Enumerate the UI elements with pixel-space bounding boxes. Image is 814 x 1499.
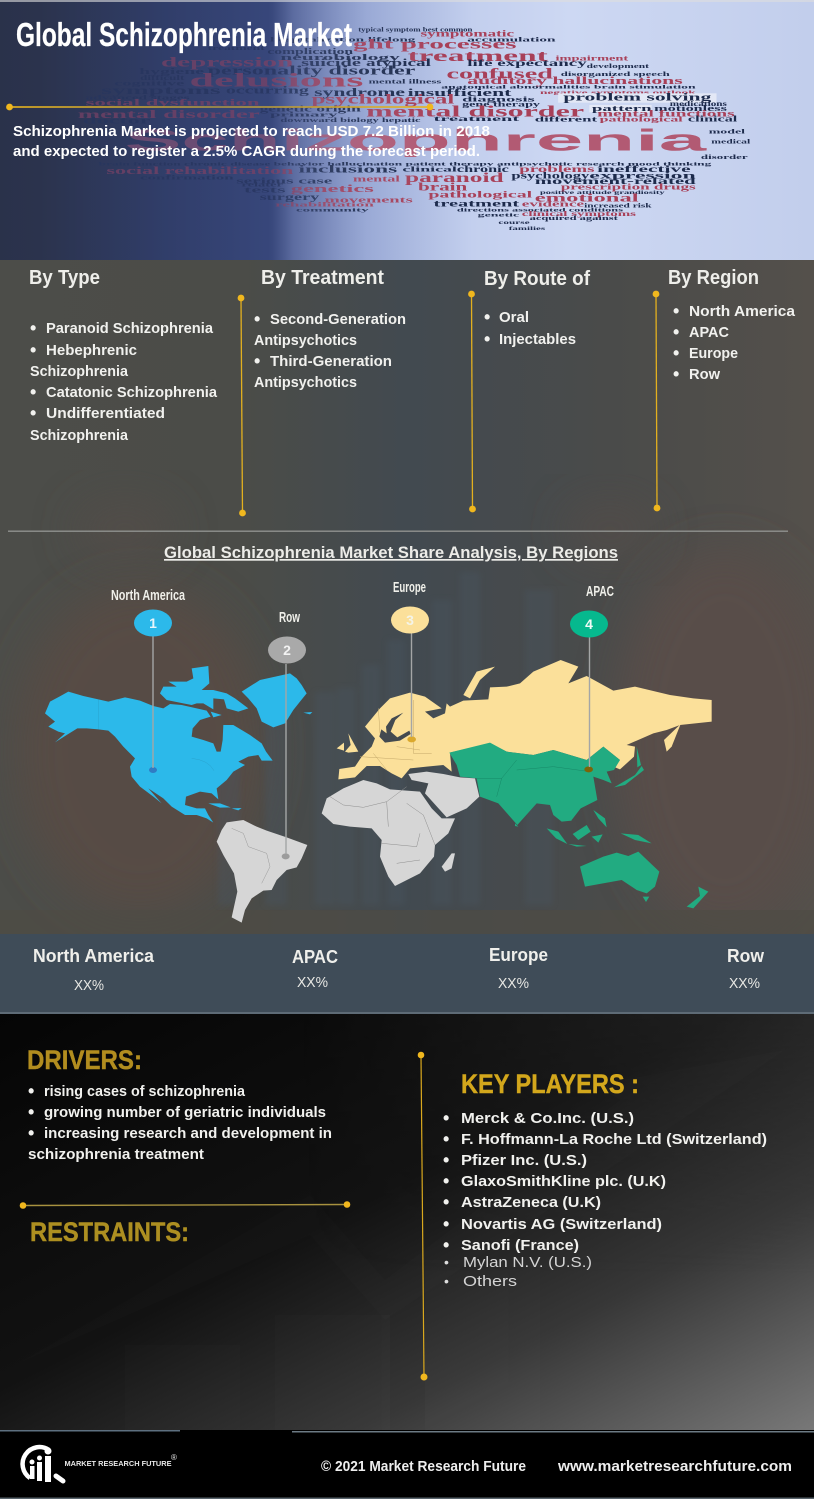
segment column: By Region: North America xyxy=(689,303,796,320)
footer website: www.marketresearchfuture.com xyxy=(557,1458,792,1475)
image: brain word cloud: mental disorder xyxy=(366,104,584,120)
image: brain word cloud: downward biology hepatic xyxy=(280,116,421,124)
image: brain word cloud: model xyxy=(709,127,746,135)
segment column: By Region: • xyxy=(673,343,679,363)
image: brain word cloud: genetic xyxy=(478,211,521,218)
pin base: North America xyxy=(149,767,157,773)
image: brain word cloud: brain xyxy=(418,181,468,193)
image: brain word cloud: paranoid xyxy=(405,170,504,185)
map pin 1: North America xyxy=(111,587,185,768)
image: brain word cloud xyxy=(78,26,751,232)
image: brain word cloud: depression xyxy=(161,54,294,70)
gold divider: drivers and restraints xyxy=(20,1201,350,1209)
image: brain word cloud: directions associated conditions xyxy=(457,206,623,213)
image: brain word cloud: doctor xyxy=(83,115,152,126)
image: brain word cloud: development xyxy=(587,63,650,70)
image: brain word cloud: symptomatic xyxy=(421,28,515,39)
segment column: By Treatment: Antipsychotics xyxy=(254,374,357,391)
list: key players: • xyxy=(443,1129,449,1149)
list: key players: • xyxy=(443,1192,449,1212)
hero summary text: and expected to register a 2.5% CAGR during the forecast period. xyxy=(13,143,480,160)
map region: South America xyxy=(217,820,307,923)
image: brain word cloud: motionless xyxy=(654,105,727,113)
segment column: By Type: • xyxy=(30,382,36,402)
image: brain word cloud: genetic origin xyxy=(260,106,361,114)
segment column: By Treatment: • xyxy=(254,351,260,371)
image: brain word cloud: movement-related xyxy=(535,176,696,186)
list: key players: • xyxy=(443,1108,449,1128)
list: key players: Merck & Co.Inc. (U.S.) xyxy=(461,1110,634,1127)
gold divider: hero xyxy=(6,104,433,110)
list: key players xyxy=(443,1108,767,1290)
list: key players: Pfizer Inc. (U.S.) xyxy=(461,1152,587,1169)
segment column: By Treatment: Second-Generation xyxy=(270,311,406,328)
image: brain word cloud: ineffective xyxy=(597,164,692,174)
image: brain word cloud: problem solving xyxy=(563,92,711,104)
map pin 1: North America: North America xyxy=(111,587,185,604)
image: brain word cloud: psychological xyxy=(312,91,455,106)
map pin 4: APAC xyxy=(570,583,614,767)
segment column: By Route of: Oral xyxy=(499,309,529,326)
map pin 2: Row: 2 xyxy=(283,642,291,658)
segment column: By Region: Europe xyxy=(689,345,738,362)
segment column: By Route of: • xyxy=(484,307,490,327)
map pin 4: APAC: APAC xyxy=(586,583,614,600)
segment column: By Region xyxy=(668,267,796,384)
panel: footer xyxy=(0,1430,814,1499)
image: brain word cloud: personality disorder xyxy=(208,63,415,78)
image: brain word cloud: surgery xyxy=(260,192,319,202)
list: key players: AstraZeneca (U.K) xyxy=(461,1194,601,1211)
image: brain word cloud: treatment xyxy=(208,45,265,52)
image: brain word cloud: life expectancy xyxy=(467,58,587,68)
image: brain word cloud: relater xyxy=(241,181,283,188)
image: brain word cloud: social rehabilitation xyxy=(106,165,295,176)
map pin 2: Row: Row xyxy=(279,609,300,626)
image: brain word cloud: syndrome xyxy=(314,86,405,99)
image: brain word cloud: psychology xyxy=(511,170,589,181)
segment column: By Type: Schizophrenia xyxy=(30,363,129,380)
segment column: By Region: By Region xyxy=(668,267,759,289)
panel: dark background for segments and map xyxy=(0,260,814,935)
image: brain word cloud: confirmation xyxy=(140,173,234,181)
image: brain word cloud: mental functions xyxy=(597,108,735,119)
segment column: By Type: Paranoid Schizophrenia xyxy=(46,320,214,337)
segment column: By Type: Schizophrenia xyxy=(30,427,129,444)
image: brain word cloud: difficult xyxy=(140,74,185,82)
image: brain word cloud: positive attitude grandiosity xyxy=(540,189,665,196)
segment column: By Route of: Injectables xyxy=(499,331,576,348)
image: brain word cloud: hygiene xyxy=(139,67,204,76)
icon: Market Research Future logo: ® xyxy=(171,1453,177,1462)
world map xyxy=(45,660,712,923)
map pin 3: Europe xyxy=(391,579,429,737)
pin base: APAC xyxy=(584,766,593,772)
segment column: By Type xyxy=(29,267,218,444)
share: North America: XX% xyxy=(74,977,104,994)
image: brain word cloud: typical symptom best common xyxy=(358,26,473,33)
segment column: By Route of: By Route of xyxy=(484,268,590,290)
image: brain word cloud: cognitive xyxy=(114,80,184,88)
image: brain word cloud: treatment xyxy=(434,198,521,209)
image: brain word cloud: tests xyxy=(244,186,287,195)
footer copyright: © 2021 Market Research Future xyxy=(321,1458,526,1475)
image: brain word cloud: expression xyxy=(589,170,696,181)
map pin 1: North America: 1 xyxy=(149,615,157,631)
image: brain word cloud: delusions xyxy=(190,70,364,91)
image: brain word cloud: insufficient xyxy=(408,87,512,98)
image: brain word cloud: pattern xyxy=(592,104,653,113)
gold vertical separators xyxy=(238,291,660,516)
image: brain word cloud: diagnosis xyxy=(462,95,535,104)
segment column: By Treatment: By Treatment xyxy=(261,267,384,289)
image: brain word cloud: pathological xyxy=(428,189,533,200)
image: brain word cloud: hospitalization lifelong xyxy=(270,36,415,43)
image: brain word cloud: medical xyxy=(711,137,751,145)
segment column: By Type: • xyxy=(30,340,36,360)
image: brain word cloud: anatomical abnormalities brain stimulation xyxy=(441,83,696,90)
list: drivers: growing number of geriatric individuals xyxy=(44,1104,326,1121)
list: drivers: • xyxy=(28,1081,34,1101)
image: brain word cloud: genetics xyxy=(291,183,374,194)
pin base: Europe xyxy=(407,736,416,742)
segment column: By Treatment: • xyxy=(254,309,260,329)
pin base: Row xyxy=(282,853,290,859)
heading: Drivers: DRIVERS: xyxy=(27,1045,142,1075)
title: Global Schizophrenia Market xyxy=(16,16,352,53)
image: brain word cloud: impairment xyxy=(556,55,629,63)
list: drivers: schizophrenia treatment xyxy=(28,1146,204,1163)
image: brain word cloud: confused xyxy=(447,66,553,82)
image: brain word cloud: Schizophrenia xyxy=(125,123,708,158)
image: brain word cloud: different xyxy=(535,116,598,124)
list: key players: • xyxy=(443,1150,449,1170)
image: brain word cloud: movements xyxy=(324,196,414,205)
image: brain word cloud: advanced stages xyxy=(86,94,190,101)
map region: North America xyxy=(45,666,312,823)
panel: regional share band xyxy=(0,934,814,1014)
share: Europe: Europe xyxy=(489,945,548,965)
list: key players: Mylan N.V. (U.S.) xyxy=(463,1254,592,1271)
share: North America: North America xyxy=(33,946,155,966)
image: brain word cloud: pathological xyxy=(600,116,683,124)
list: key players: Sanofi (France) xyxy=(461,1237,579,1254)
image: brain word cloud: medications xyxy=(670,100,727,108)
image: brain word cloud: neurobiology xyxy=(280,53,400,62)
image: brain word cloud: inclusions xyxy=(299,163,397,175)
panel: drivers, restraints and key players xyxy=(0,1014,814,1430)
list: key players: • xyxy=(443,1214,449,1234)
image: brain word cloud: clinical xyxy=(688,116,737,124)
image: brain word cloud: complication xyxy=(267,47,354,56)
image: brain word cloud: prescription drugs xyxy=(561,182,697,192)
map pin 3: Europe: 3 xyxy=(406,612,414,628)
image: brain word cloud: course xyxy=(498,219,531,226)
map region: Asia Pacific xyxy=(449,743,708,908)
image: brain word cloud: community xyxy=(296,206,369,213)
segment column: By Type: • xyxy=(30,318,36,338)
segment column: By Route of xyxy=(484,268,590,349)
image: brain word cloud: clinical xyxy=(402,166,458,174)
segment column: By Type: Catatonic Schizophrenia xyxy=(46,384,218,401)
image: brain word cloud: treatment xyxy=(434,115,521,123)
image: brain word cloud: serious case xyxy=(236,177,333,186)
list: drivers: increasing research and development in xyxy=(44,1125,332,1142)
list: key players: Novartis AG (Switzerland) xyxy=(461,1216,662,1233)
image: brain word cloud: brain function chronic disease behavior hallucination patient therapy antipsychotic research mood thinking xyxy=(99,161,712,167)
image: brain word cloud: accumulation xyxy=(467,36,557,43)
segment column: By Region: APAC xyxy=(689,324,729,341)
share: APAC: APAC xyxy=(292,947,338,967)
list: drivers: rising cases of schizophrenia xyxy=(44,1083,246,1100)
icon: Market Research Future logo xyxy=(23,1447,177,1482)
segment column: By Treatment: Third-Generation xyxy=(270,353,392,370)
image: brain word cloud: mental illness xyxy=(369,77,442,85)
image: brain word cloud: evidence xyxy=(522,201,585,209)
gold vertical separator: key players xyxy=(418,1052,428,1380)
hero dark gradient overlay xyxy=(0,0,814,260)
image: brain word cloud: increased risk xyxy=(584,202,653,209)
image: brain word cloud: rehabilitation xyxy=(275,201,374,208)
share: Row xyxy=(727,946,765,992)
image: brain word cloud: occurring xyxy=(226,84,310,96)
image: brain word cloud: chronic xyxy=(457,164,510,174)
share: North America xyxy=(33,946,155,994)
image: brain word cloud: social dysfunction xyxy=(86,97,260,108)
segment column: By Type: • xyxy=(30,403,36,423)
share: Row: Row xyxy=(727,946,765,966)
segment column: By Route of: • xyxy=(484,329,490,349)
heading: Restraints: RESTRAINTS: xyxy=(30,1217,189,1247)
list: drivers: • xyxy=(28,1102,34,1122)
list: key players: • xyxy=(443,1171,449,1191)
image: brain word cloud: symptoms xyxy=(101,84,221,97)
map region: Africa and Middle East xyxy=(322,772,479,886)
segment column: By Region: • xyxy=(673,322,679,342)
list: key players: GlaxoSmithKline plc. (U.K) xyxy=(461,1173,666,1190)
hero summary text: Schizophrenia Market is projected to reach USD 7.2 Billion in 2018 xyxy=(13,123,490,140)
image: brain word cloud: problems xyxy=(519,164,595,174)
image: brain word cloud: mental disorder xyxy=(78,108,260,121)
share: APAC: XX% xyxy=(297,974,328,991)
icon: Market Research Future logo: MARKET RESEARCH FUTURE xyxy=(64,1459,172,1468)
image: brain word cloud: clinical symptoms xyxy=(522,210,636,218)
share: Europe: XX% xyxy=(498,975,529,992)
share: APAC xyxy=(292,947,338,991)
share: Row: XX% xyxy=(729,975,760,992)
image: brain word cloud: families xyxy=(509,225,545,232)
image: brain word cloud: suicide xyxy=(301,58,361,69)
map region: Europe and Russia xyxy=(337,660,712,779)
image: brain word cloud: disorganized speech xyxy=(561,70,670,78)
segment column: By Type: Undifferentiated xyxy=(46,405,165,422)
segment column: By Region: • xyxy=(673,301,679,321)
list: key players: • xyxy=(444,1273,449,1289)
segment column: By Region: • xyxy=(673,364,679,384)
image: brain word cloud: emotional xyxy=(535,192,640,205)
share: Europe xyxy=(489,945,548,992)
image: brain word cloud: disorder xyxy=(701,153,748,161)
image: brain word cloud: atypical xyxy=(366,58,431,69)
map heading: Global Schizophrenia Market Share Analysis, By Regions xyxy=(164,543,618,562)
segment column: By Treatment: Antipsychotics xyxy=(254,332,357,349)
list: key players: • xyxy=(443,1235,449,1255)
list: key players: • xyxy=(444,1254,449,1270)
image: brain word cloud: negative symptoms outlook xyxy=(540,89,696,96)
panel: hero banner xyxy=(0,0,814,260)
segment column: By Region: Row xyxy=(689,366,720,383)
heading: Key Players: KEY PLAYERS : xyxy=(461,1069,639,1099)
map pin 2: Row xyxy=(268,609,306,854)
map pin 4: APAC: 4 xyxy=(585,616,593,632)
image: brain word cloud: primary xyxy=(270,111,339,118)
image: brain word cloud: gene therapy xyxy=(462,101,540,109)
list: key players: F. Hoffmann-La Roche Ltd (Switzerland) xyxy=(461,1131,767,1148)
list: key players: Others xyxy=(463,1273,517,1290)
map pin 3: Europe: Europe xyxy=(393,579,426,596)
hero summary text xyxy=(13,123,490,160)
list: drivers xyxy=(28,1081,332,1163)
image: brain word cloud: mental xyxy=(353,175,400,184)
segment column: By Type: Hebephrenic xyxy=(46,342,137,359)
image: brain word cloud: acquired against xyxy=(530,215,618,222)
image: brain word cloud: treatment xyxy=(408,46,548,65)
image: brain word cloud: auditory hallucinations xyxy=(467,76,684,87)
image: brain word cloud: ght processes xyxy=(353,36,517,51)
segment column: By Treatment xyxy=(254,267,406,391)
list: drivers: • xyxy=(28,1123,34,1143)
segment column: By Type: By Type xyxy=(29,267,100,289)
